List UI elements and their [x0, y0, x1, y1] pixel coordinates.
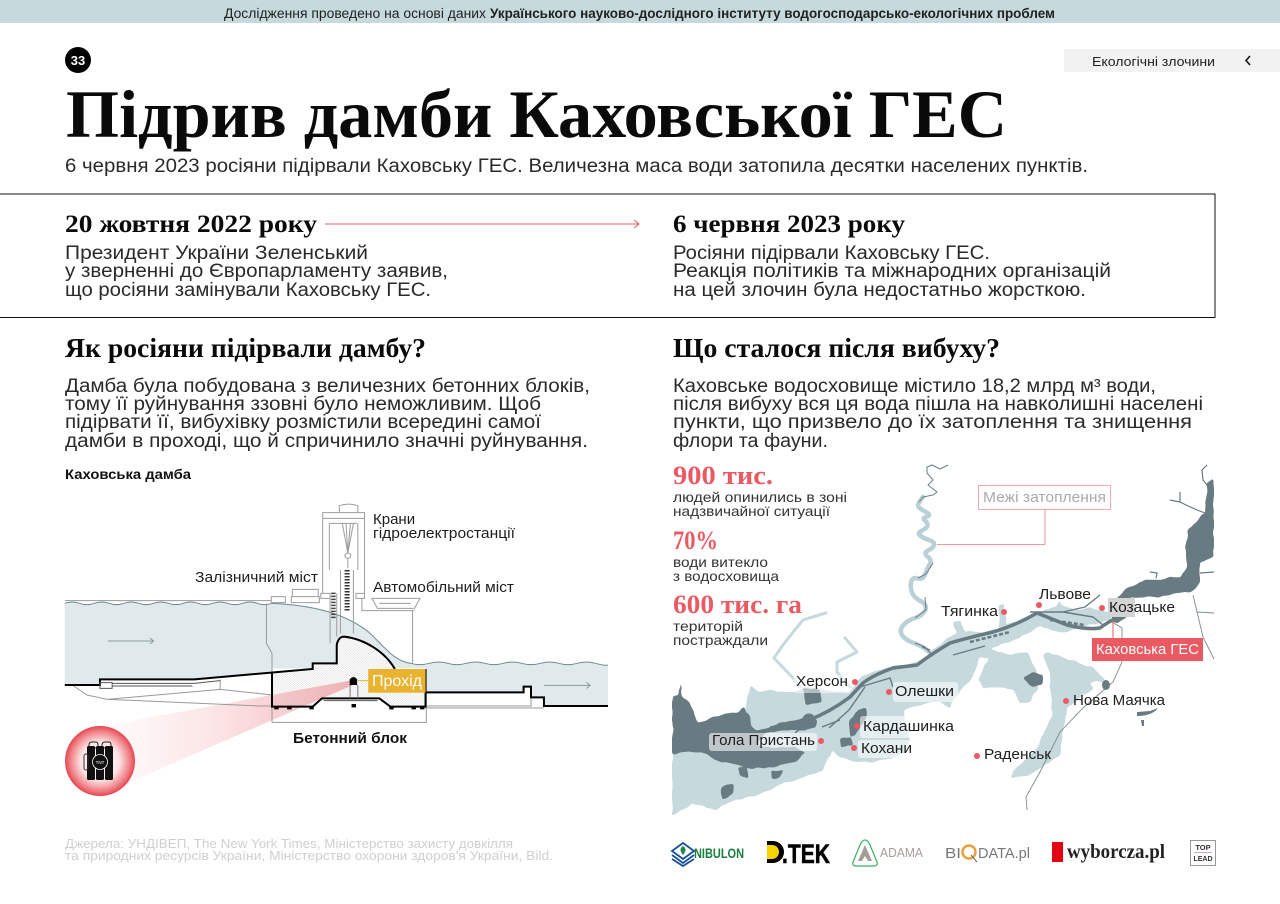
stat: 600 thousand hectares: територій	[673, 618, 743, 634]
left paragraph: дамби в проході, що й спричинило значні руйнування.	[65, 431, 588, 452]
timeline date 2: 6 червня 2023 року	[673, 211, 906, 238]
stat: 900 thousand people: людей опинились в зоні	[673, 489, 847, 505]
label: cranes: Крани	[373, 511, 415, 528]
timeline text 1: що росіяни замінували Каховську ГЕС.	[65, 280, 431, 301]
city markers: Кардашинка	[863, 718, 955, 735]
title: Підрив дамби Каховської ГЕС	[66, 76, 1007, 152]
timeline arrow	[325, 220, 639, 228]
timeline text 2: на цей злочин була недостатньо жорсткою.	[673, 280, 1086, 301]
logo: Top Lead: TOP	[1195, 843, 1211, 852]
river side branches	[770, 595, 1103, 733]
bridges	[271, 589, 420, 611]
crane	[323, 504, 364, 643]
timeline text 1: Президент України Зеленський	[65, 243, 368, 264]
city markers: Херсон	[796, 673, 848, 690]
city markers: Раденськ	[984, 746, 1051, 763]
water	[65, 602, 608, 706]
delta hub	[802, 714, 816, 726]
flood boundary callout: Межі затоплення	[983, 489, 1106, 506]
left paragraph: Дамба була побудована з величезних бетонних блоків,	[65, 376, 590, 397]
water surface lines	[65, 602, 608, 665]
icon: TNT bomb: TNT	[96, 760, 105, 765]
stat: 70 percent water: води витекло	[673, 554, 768, 570]
passage	[350, 677, 357, 685]
stat: 900 thousand people: надзвичайної ситуації	[673, 503, 830, 519]
creeks	[774, 613, 857, 687]
drainage marks	[274, 704, 424, 709]
heading: what happened after: Що сталося після вибуху?	[673, 333, 1000, 363]
logo: BIQDATA: DATA.pl	[978, 845, 1030, 862]
city markers: Козацьке	[1109, 599, 1175, 616]
logo: DTEK	[767, 839, 830, 869]
stat: 900 thousand people: 900 тис.	[673, 461, 773, 490]
city markers: Нова Маячка	[1073, 692, 1166, 709]
flow arrows	[108, 638, 590, 688]
diagram title: Каховська дамба	[65, 466, 191, 482]
left paragraph	[65, 376, 590, 452]
label: railway bridge: Залізничний міст	[195, 569, 318, 586]
sources: та природних ресурсів України, Міністерство охорони здоров'я України, Bild.	[65, 849, 553, 863]
flood boundary callout	[937, 486, 1110, 544]
dark bay and islands	[672, 672, 1043, 800]
logo: Nibulon	[672, 843, 744, 866]
right paragraph: Каховське водосховище містило 18,2 млрд м³ води,	[673, 376, 1156, 397]
partner logos	[672, 839, 1216, 869]
timeline panel	[0, 194, 1215, 318]
sources	[65, 837, 553, 863]
stat: 70 percent water	[673, 526, 779, 584]
logo: Adama: ADAMA	[880, 846, 924, 860]
flooded land	[672, 600, 1114, 817]
logo: Top Lead	[1190, 840, 1216, 866]
timeline text 1: у зверненні до Європарламенту заявив,	[65, 261, 448, 282]
river island strip	[970, 620, 1085, 642]
city markers	[712, 586, 1175, 763]
passage label: Прохід	[372, 673, 422, 690]
label: cranes: гідроелектростанції	[373, 525, 516, 542]
label: cranes	[373, 511, 516, 542]
label: road bridge: Автомобільний міст	[373, 579, 514, 596]
city markers: Кохани	[861, 740, 912, 757]
left paragraph: тому її руйнування ззовні було неможливим. Щоб	[65, 394, 541, 415]
right paragraph	[673, 376, 1203, 452]
heading: how the dam was blown: Як росіяни підірвали дамбу?	[65, 333, 426, 363]
city markers: Львове	[1039, 586, 1091, 603]
timeline text 2: Росіяни підірвали Каховську ГЕС.	[673, 243, 990, 264]
stat: 900 thousand people	[673, 461, 847, 519]
left paragraph: підірвати її, вибухівку розмістили всередині самої	[65, 412, 542, 433]
stat: 70 percent water: з водосховища	[673, 568, 779, 584]
timeline text 1	[65, 243, 448, 301]
sources: Джерела: УНДІВЕП, The New York Times, Міністерство захисту довкілля	[65, 837, 513, 851]
category tag	[1064, 49, 1280, 72]
logo: BIQDATA	[945, 845, 1030, 862]
thick black section line	[65, 637, 608, 707]
dam callout: Каховська ГЕС	[1096, 641, 1199, 658]
Kakhovka reservoir	[1026, 465, 1214, 810]
logo: BIQDATA: BI	[945, 845, 961, 862]
logo: Adama	[853, 840, 924, 866]
stat: 600 thousand hectares: постраждали	[673, 632, 768, 648]
logo: Top Lead: LEAD	[1193, 856, 1213, 863]
timeline date 1: 20 жовтня 2022 року	[65, 211, 318, 238]
gate stripes	[345, 570, 350, 612]
dam callout	[1092, 620, 1203, 661]
city markers: Олешки	[895, 683, 954, 700]
timeline text 2: Реакція політиків та міжнародних організацій	[673, 261, 1111, 282]
upper river channel	[915, 465, 948, 655]
stat: 70 percent water: 70%	[673, 526, 718, 555]
dam cross-section diagram	[65, 504, 608, 796]
logo: Nibulon: NIBULON	[694, 845, 744, 861]
top source banner	[0, 0, 1280, 23]
label backgrounds	[709, 598, 1135, 758]
upper river meanders	[901, 497, 934, 655]
explosive beam	[100, 681, 355, 795]
label: concrete block: Бетонний блок	[293, 731, 408, 747]
right paragraph: флори та фауни.	[673, 431, 828, 452]
stat: 600 thousand hectares	[673, 590, 802, 648]
logo: DTEK: .TEK	[782, 839, 830, 869]
issue number badge: 33	[71, 53, 85, 68]
thin structural outlines	[65, 601, 544, 722]
right paragraph: пункти, що призвело до їх затоплення та знищення	[673, 412, 1192, 433]
right paragraph: після вибуху вся ця вода пішла на навколишні населені	[673, 394, 1203, 415]
timeline text 2	[673, 243, 1111, 301]
logo: Wyborcza: wyborcza.pl	[1067, 841, 1165, 863]
main river channel	[809, 613, 1113, 720]
subtitle: 6 червня 2023 росіяни підірвали Каховську ГЕС. Величезна маса води затопила десятки населених пунктів.	[65, 156, 1088, 177]
category tag: Екологічні злочини	[1092, 54, 1215, 69]
city markers: Тягинка	[941, 603, 999, 620]
city markers: Гола Пристань	[712, 732, 815, 749]
top source banner: Українського науково-дослідного інституту водогосподарсько-екологічних проблем	[490, 6, 1055, 21]
flood map	[672, 465, 1214, 817]
icon: TNT bomb	[65, 726, 135, 796]
issue number badge	[65, 47, 91, 73]
concrete hatched block	[272, 637, 426, 707]
stat: 600 thousand hectares: 600 тис. га	[673, 590, 802, 619]
top source banner: Дослідження проведено на основі даних	[224, 6, 486, 21]
